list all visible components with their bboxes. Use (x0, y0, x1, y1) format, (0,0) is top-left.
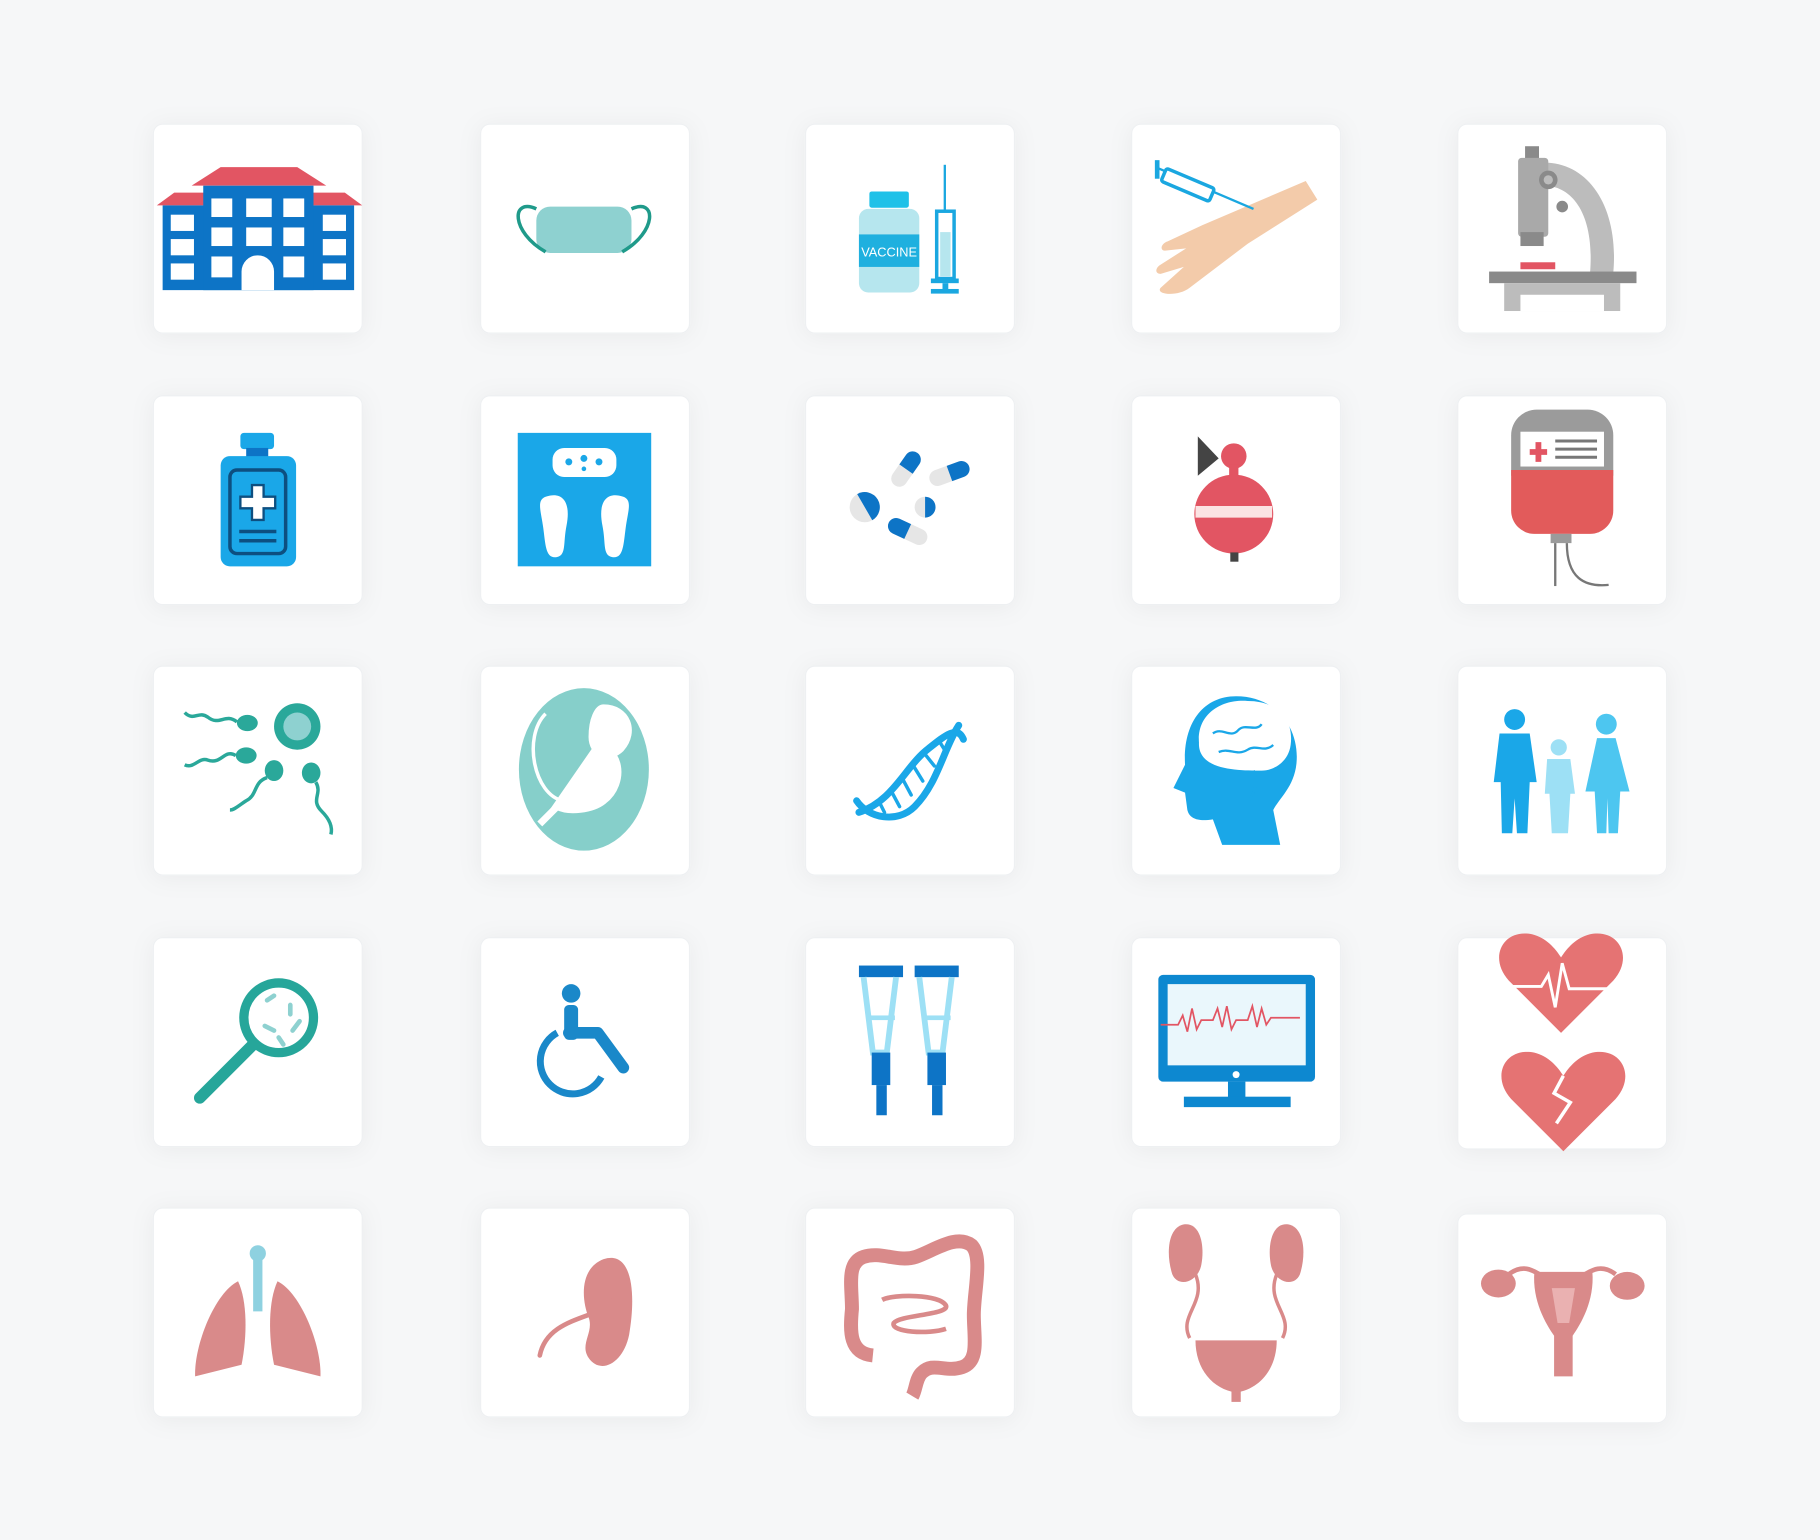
icon: crutches (859, 966, 959, 1115)
icon: sperm and egg (185, 703, 331, 834)
icon: uterus (1481, 1269, 1645, 1376)
icon: vaccine: VACCINE (861, 244, 917, 259)
icon: lungs (195, 1245, 321, 1376)
icon: pills (850, 448, 972, 548)
icon: microscope (1489, 146, 1636, 311)
icon: weight scale (518, 433, 651, 566)
icon: fetus (519, 688, 649, 851)
icon: vaccine (859, 165, 959, 294)
icon: bulb buoy (1194, 436, 1273, 562)
icon: DNA (857, 725, 963, 817)
icon: hospital (157, 167, 362, 290)
icon: face mask (518, 207, 650, 253)
icon: blood bag (1511, 410, 1613, 586)
icon: wheelchair (540, 984, 623, 1094)
icon: medicine bottle (221, 433, 296, 566)
icon: heart monitor (1158, 975, 1315, 1107)
icon: hearts (1499, 933, 1625, 1151)
icon: intestines (851, 1241, 977, 1396)
icon: urinary system (1169, 1224, 1303, 1402)
icon: head brain (1173, 696, 1297, 845)
icon: magnifier bacteria (200, 983, 313, 1098)
icon: family (1494, 709, 1630, 833)
icon: arm injection (1155, 160, 1317, 294)
icon: kidney (540, 1258, 632, 1366)
panel: card grid (153, 124, 1667, 1423)
